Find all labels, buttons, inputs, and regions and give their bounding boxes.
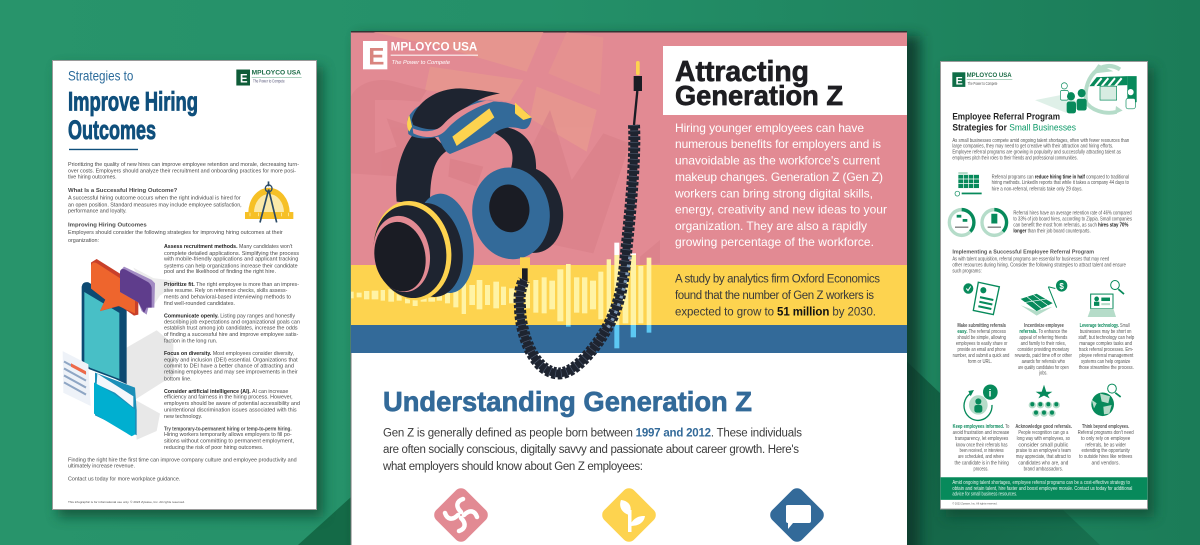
title: Attracting Generation Z: Generation Z <box>675 80 843 111</box>
text block: leverage technology: track referral processes. Em- <box>1079 347 1133 353</box>
text block: implementing heading: such programs: <box>952 268 982 275</box>
text block: incentivize employee referrals: jobs. <box>1038 371 1047 377</box>
text block: retention <box>1013 210 1132 235</box>
text block: closing: This infographic is for informational use only. © 2023 Zywave, Inc. All rights reserved. <box>68 500 185 504</box>
logo: Employco USA green: MPLOYCO USA <box>967 72 1012 79</box>
heading: Improve Hiring Outcomes: Improve Hiring <box>68 86 198 117</box>
text block: incentivize employee referrals <box>1015 323 1072 377</box>
heading: Employee Referral Program Strategies for Small Businesses <box>952 111 1077 133</box>
logo: Employco USA green: E <box>956 75 963 88</box>
text block: improving hiring outcomes: organization: <box>68 238 99 244</box>
text block: leverage technology: Leverage technology. Small <box>1080 323 1130 329</box>
text block: strategies list: bottom line. <box>164 376 192 382</box>
text block: strategies list: ments and behavioral-based interviewing methods to <box>164 295 291 301</box>
callout: green footer band: advice for small business resources. <box>952 492 1017 498</box>
text block: incentivize employee referrals: Incentivize employee <box>1024 323 1064 329</box>
text block: closing: Contact us today for more workplace guidance. <box>68 476 181 482</box>
text block: make submitting referrals easy: provide an email and phone <box>957 347 1006 353</box>
text block: incentivize employee referrals: appeal of referring friends <box>1019 335 1068 341</box>
equalizer bars <box>351 243 651 348</box>
text block: leverage technology: ployee referral management <box>1079 353 1134 359</box>
text block: what is a successful hiring outcome: performance and loyalty. <box>68 208 127 214</box>
text block: acknowledge good referrals: brand ambassadors. <box>1024 466 1063 472</box>
callout: green footer band: Amid ongoing talent shortages, employee referral programs can be a cost-effective strategy to <box>952 480 1130 486</box>
text block: intro: over costs. Employers should analyze their recruitment and onboarding practices for more posi- <box>68 168 296 174</box>
text block: strategies list: find well-rounded candidates. <box>164 301 235 307</box>
text block: strategies list: Consider artificial intelligence (AI). AI can increase <box>164 389 288 395</box>
text block: intro: Prioritizing the quality of new hires can improve employee retention and morale, decreasing turn- <box>68 162 299 168</box>
icon: money stack with dollar <box>1021 280 1067 316</box>
illustration: phone, chat bubbles and folder <box>63 259 180 440</box>
text block: leverage technology: staff, but technology can help <box>1078 335 1134 341</box>
heading: Strategies to: Strategies to <box>68 68 133 84</box>
logo: Employco USA green: MPLOYCO USA <box>252 70 301 77</box>
chart: retention donuts <box>949 210 1007 235</box>
text block: keep employees informed: avoid frustration and increase <box>953 430 1009 436</box>
callout: green footer band: obtain and retain talent, hire faster and boost employee morale. Contact us today for additional <box>952 486 1132 492</box>
footnote: © 2023 Zywave, Inc. All rights reserved. <box>952 501 998 505</box>
text block: acknowledge good referrals: may appreciate, that attract to <box>1016 454 1071 460</box>
icon: protractor and compass <box>245 181 293 222</box>
text block: what is a successful hiring outcome: What Is a Successful Hiring Outcome? <box>68 188 178 194</box>
text block: leverage technology: businesses may be short on <box>1080 329 1132 335</box>
text block: improving hiring outcomes <box>68 222 283 244</box>
heading: Employee Referral Program Strategies for Small Businesses: Strategies for Small Businesses <box>952 123 1077 133</box>
text block: think beyond employees: to outside hires like retirees <box>1079 454 1133 460</box>
text block: intro: Employee referral programs are growing in popularity and successfully attracting talent as <box>952 150 1121 156</box>
text block: incentivize employee referrals: rewards, paid time off or other <box>1015 353 1072 359</box>
text block: acknowledge good referrals: People recognition can go a <box>1018 430 1068 436</box>
text block: think beyond employees: to only rely on employee <box>1081 436 1130 442</box>
text block: keep employees informed: been received, or interviews <box>960 448 1004 454</box>
text block: hiring younger employees: numerous benefits for employers and is <box>675 137 881 151</box>
text block: strategies list: complete detailed applications. Simplifying the process <box>164 251 299 257</box>
panel: referral program document <box>940 62 1154 517</box>
text block: retention: Referral hires have an average retention rate of 46% compared <box>1013 210 1132 217</box>
text block: make submitting referrals easy: form or URL. <box>968 359 992 365</box>
text block: strategies list: Assess recruitment methods. Many candidates won't <box>164 244 293 250</box>
text block: strategies list: sitions without committing to permanent employment, <box>164 438 294 445</box>
logo: Employco USA white: E <box>368 44 384 71</box>
text block: incentivize employee referrals: and family to their roles, <box>1021 341 1066 347</box>
logo: Employco USA white: MPLOYCO USA <box>391 40 478 54</box>
text block: closing: ultimately increase revenue. <box>68 463 135 470</box>
text block: strategies list: equity and inclusion (DEI) essential. Organizations that <box>164 357 298 364</box>
text block: leverage technology: systems can help organize <box>1081 359 1130 365</box>
text block: think beyond employees: extending the opportunity <box>1081 448 1130 454</box>
icon: laptop and magnifier <box>1088 281 1124 317</box>
text block: keep employees informed <box>953 424 1009 472</box>
icon: blue speech bubble diamond <box>767 485 827 545</box>
text block: strategies list: commit to DEI have a better chance of attracting and <box>164 363 294 369</box>
text block: implementing heading <box>952 250 1126 275</box>
text block: incentivize employee referrals: awards for referrals who <box>1022 359 1065 365</box>
text block: intro: As small businesses compete amid ongoing talent shortages, often with fewer resources than <box>952 138 1129 144</box>
text block: strategies list: Communicate openly. Listing pay ranges and honestly <box>164 313 295 319</box>
icon: checklist document <box>963 282 999 315</box>
text block: strategies list: reducing the risk of poor hiring outcomes. <box>164 445 264 451</box>
text block: what is a successful hiring outcome: an open position. Standard measures may include employee satisfaction, <box>68 202 242 209</box>
text block: make submitting referrals easy: Make submitting referrals <box>957 323 1006 329</box>
text block: strategies list: sive resume. Rely on reference checks, skills assess- <box>164 288 288 294</box>
logo: Employco USA green <box>236 70 302 86</box>
text block: think beyond employees <box>1078 424 1134 466</box>
text block: think beyond employees: Think beyond employees. <box>1082 424 1130 430</box>
panel: attracting generation Z document <box>350 31 920 545</box>
logo: Employco USA green: The Power to Compete <box>968 81 998 86</box>
hero: colour bands <box>351 31 907 353</box>
text block: improving hiring outcomes: Employers should consider the following strategies for improving hiring outcomes at their <box>68 230 283 236</box>
icon: money stack with dollar: $ <box>1059 282 1064 291</box>
text block: make submitting referrals easy: number, and submit a quick and <box>953 353 1009 359</box>
icon: star and team <box>1029 385 1060 417</box>
text block: improving hiring outcomes: Improving Hiring Outcomes <box>68 222 147 228</box>
text block: implementing heading: As with talent acquisition, referral programs are essential for businesses that may need <box>952 256 1109 262</box>
logo: Employco USA green: The Power to Compete <box>253 79 285 84</box>
icon: person with info badge <box>964 384 998 420</box>
text block: intro: tive hiring outcomes. <box>68 175 117 181</box>
logo: Employco USA green <box>952 72 1012 88</box>
text block: strategies list: faction in the long run. <box>164 338 218 344</box>
heading: Improve Hiring Outcomes <box>68 86 198 150</box>
text block: hiring younger employees: organization. They are also a rapidly <box>675 219 867 233</box>
text block: hiring time <box>992 174 1129 193</box>
text block: think beyond employees: Referral programs don't need <box>1078 430 1134 436</box>
text block: leverage technology <box>1078 323 1134 371</box>
text block: strategies list: efficiency and fairness in the hiring process. However, <box>164 395 293 401</box>
text block: incentivize employee referrals: consider providing monetary <box>1017 347 1070 353</box>
text block: think beyond employees: referrals, be as wider <box>1085 442 1126 448</box>
text block: strategies list: retaining employees and may see improvements in their <box>164 370 298 376</box>
text block: leverage technology: manage complex tasks and <box>1079 341 1132 347</box>
text block: intro <box>68 162 299 181</box>
text block: leverage technology: those streamline the process. <box>1079 365 1134 371</box>
text block: hiring younger employees: energy, creativity and new ideas to your <box>675 202 887 216</box>
text block: strategies list: Try temporary-to-permanent hiring or temp-to-perm hiring. <box>164 426 292 432</box>
text block: acknowledge good referrals <box>1015 424 1072 472</box>
text block: make submitting referrals easy <box>953 323 1009 365</box>
text block: strategies list: employers should be aware of potential accessibility and <box>164 401 300 407</box>
text block: keep employees informed: know once their referrals has <box>956 442 1008 448</box>
text block: hiring younger employees: Hiring younger employees can have <box>675 121 864 135</box>
text block: acknowledge good referrals: Acknowledge good referrals. <box>1015 424 1072 430</box>
text block: strategies list: with mobile-friendly applications and applicant tracking <box>163 257 298 263</box>
text block: implementing heading: Implementing a Successful Employee Referral Program <box>952 250 1094 256</box>
text block: keep employees informed: Keep employees informed. To <box>953 424 1009 430</box>
text block: make submitting referrals easy: employees to easily share or <box>956 341 1008 347</box>
illustration: referral storefront <box>1035 64 1137 114</box>
text block: incentivize employee referrals: referrals. To enhance the <box>1019 329 1067 335</box>
text block: hiring time: Referral programs can reduce hiring time in half compared to traditional <box>992 174 1129 180</box>
text block: think beyond employees: and vendors. <box>1091 460 1120 466</box>
text block: strategies list: new technology. <box>164 414 203 420</box>
text block: strategies list: of finding a successful hire and improve employee satis- <box>164 332 299 338</box>
text block: keep employees informed: transparency, let employees <box>955 436 1009 442</box>
heading: Improve Hiring Outcomes: Outcomes <box>68 115 156 145</box>
text block: Oxford Economics study: expected to grow to 51 million by 2030. <box>675 306 876 318</box>
text block: hiring younger employees: unavoidable as the workforce's current <box>675 154 881 168</box>
text block: strategies list: describing job expectations and organizational goals can <box>164 319 300 325</box>
text block: retention: longer than their job board counterparts. <box>1013 228 1091 235</box>
icon: yellow sprout diamond <box>599 485 659 545</box>
text block: Oxford Economics study <box>675 274 880 318</box>
illustration: coiled cable and jack <box>520 61 642 373</box>
heading: Understanding Generation Z: Understanding Generation Z <box>383 386 752 417</box>
title: Attracting Generation Z <box>663 46 907 115</box>
text block: strategies list: systems can help organizations increase their candidate <box>164 263 298 269</box>
text block: Gen Z definition: are often socially conscious, digitally savvy and passionate about career growth. Here's <box>383 444 799 456</box>
text block: keep employees informed: process. <box>973 466 988 472</box>
panel: hiring outcomes document <box>52 60 323 517</box>
text block: strategies list: Focus on diversity. Most employees consider diversity, <box>164 351 294 357</box>
text block: retention: can benefit the most from referrals, as such hires stay 70% <box>1013 222 1129 228</box>
title: Attracting Generation Z: Attracting <box>675 56 809 88</box>
text block: retention: to 33% of job board hires, according to Zippia. Small companies <box>1013 216 1132 222</box>
text block: hiring younger employees <box>674 121 887 249</box>
text block: make submitting referrals easy: easy. The referral process <box>957 329 1006 335</box>
text block: acknowledge good referrals: long way with employees, so <box>1017 436 1070 442</box>
text block: make submitting referrals easy: should be simple, allowing <box>957 335 1006 341</box>
text block: Gen Z definition <box>382 428 802 473</box>
text block: closing <box>68 457 297 504</box>
icon: pink pinwheel diamond <box>431 485 491 545</box>
logo: Employco USA white: The Power to Compete <box>392 60 450 66</box>
text block: hiring time: hiring methods. LinkedIn reports that while it takes a company 44 days to <box>992 180 1129 186</box>
text block: strategies list: unintentional discrimination issues associated with this <box>164 407 297 414</box>
text block: hiring time: hire a non-referral, referrals take only 29 days. <box>992 186 1083 193</box>
text block: what is a successful hiring outcome <box>68 188 242 214</box>
text block: intro: employees pitch their roles to their friends and professional communities. <box>952 155 1078 162</box>
text block: closing: Finding the right hire the first time can improve company culture and employee productivity and <box>68 457 297 463</box>
text block: implementing heading: other resources during hiring. Consider the following strategies to attract talent and ensure <box>952 262 1126 268</box>
logo: Employco USA green: E <box>240 74 248 86</box>
text block: incentivize employee referrals: are quality candidates for open <box>1018 365 1069 371</box>
text block: strategies list: Prioritize fit. The right employee is more than an impres- <box>164 282 299 288</box>
text block: keep employees informed: the candidate is in the hiring <box>954 460 1009 466</box>
text block: strategies list <box>163 244 300 451</box>
text block: strategies list: Hiring workers temporarily allows employers to fill po- <box>164 432 292 438</box>
text block: intro <box>952 138 1129 162</box>
icon: globe and magnifier <box>1091 384 1121 416</box>
illustration: headphones <box>366 88 571 307</box>
icon: person with info badge: i <box>989 388 992 399</box>
text block: acknowledge good referrals: candidates who are, and <box>1018 460 1068 466</box>
text block: keep employees informed: are scheduled, and where <box>958 454 1004 460</box>
hero: faint background lettering and headphones <box>351 32 660 373</box>
text block: Oxford Economics study: A study by analytics firm Oxford Economics <box>675 274 880 286</box>
text block: hiring younger employees: workers can bring strong digital skills, <box>674 186 873 200</box>
logo: Employco USA white <box>363 40 478 71</box>
icon: calendar <box>955 172 982 196</box>
callout: green footer band <box>940 477 1148 500</box>
text block: Gen Z definition: what employers should know about Gen Z employees: <box>382 461 643 473</box>
text block: what is a successful hiring outcome: A successful hiring outcome occurs when the right individual is hired for <box>68 195 241 202</box>
text block: hiring younger employees: growing percentage of the workforce. <box>675 235 874 249</box>
text block: Oxford Economics study: found that the number of Gen Z workers is <box>675 290 874 302</box>
text block: acknowledge good referrals: consider small public <box>1018 442 1069 448</box>
text block: Gen Z definition: Gen Z is generally defined as people born between 1997 and 2012. These individuals <box>383 428 802 440</box>
text block: strategies list: establish trust among job candidates, increase the odds <box>164 325 298 332</box>
text block: strategies list: pool and the likelihood of finding the right hire. <box>164 269 276 275</box>
text block: hiring younger employees: makeup changes. Generation Z (Gen Z) <box>675 170 883 184</box>
heading: Employee Referral Program Strategies for Small Businesses: Employee Referral Program <box>952 111 1060 122</box>
text block: acknowledge good referrals: praise to an employee's team <box>1016 448 1071 454</box>
text block: intro: large companies, they may need to get creative with their attraction and hiring efforts. <box>952 144 1113 150</box>
